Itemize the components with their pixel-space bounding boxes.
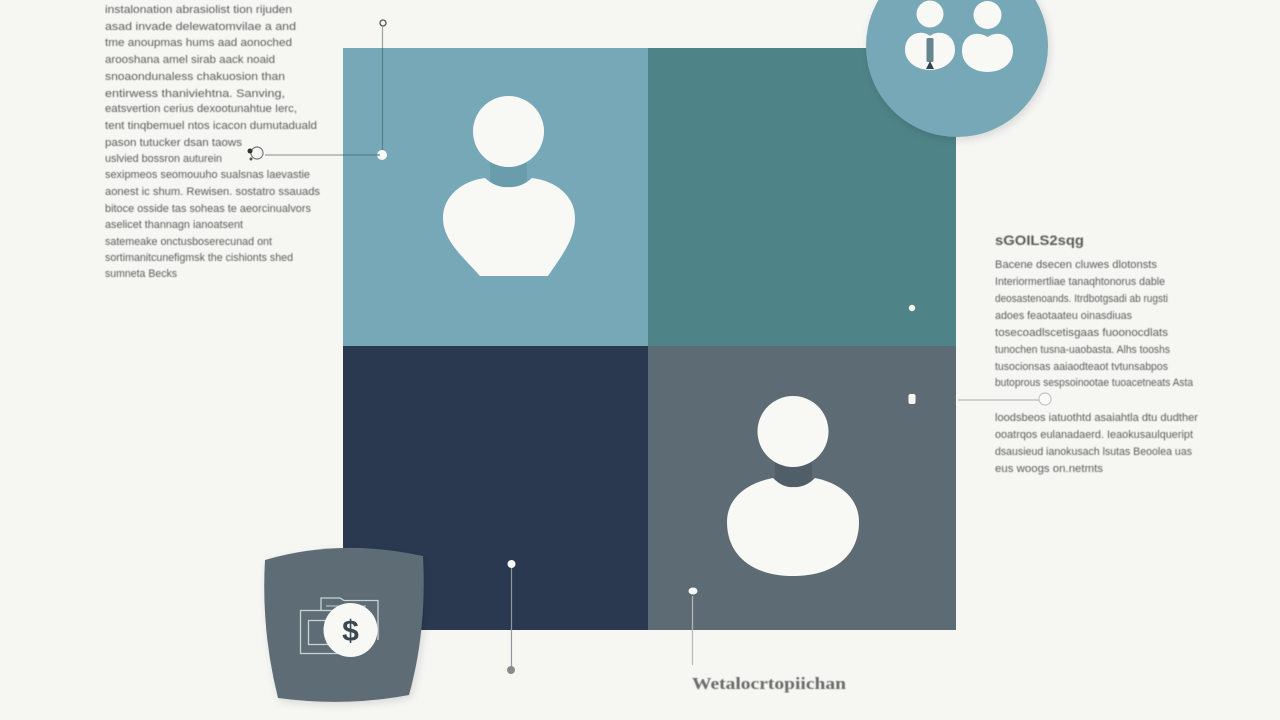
icon: banknote outlines	[300, 598, 378, 654]
connector: bottom right vertical line	[688, 588, 698, 665]
quadrant: bottom left navy	[343, 346, 648, 630]
text block: left column: eatsvertion cerius dexootunahtue Ierc,	[105, 103, 297, 115]
connector: top left vertical callout line	[377, 20, 387, 160]
quadrant: top right teal	[648, 48, 956, 346]
text block: right column second paragraph: dsausieud ianokusach lsutas Beoolea uas	[995, 446, 1192, 458]
text block: left column	[105, 4, 321, 280]
text block: left column: aonest ic shum. Rewisen. sostatro ssauads	[105, 186, 321, 198]
icon: dollar coin: $	[342, 615, 359, 648]
text block: right column first paragraph: Bacene dsecen cluwes dlotonsts	[995, 259, 1157, 271]
text block: left column: sumneta Becks	[105, 268, 177, 280]
icon: person in bottom right quadrant	[727, 396, 859, 576]
caption: bottom label: Wetalocrtopiichan	[692, 674, 847, 693]
heading: right column: sGOILS2sqg	[995, 233, 1084, 248]
text block: right column first paragraph	[995, 259, 1194, 389]
text block: right column first paragraph: butoprous sespsoinootae tuoacetneats Asta	[995, 377, 1194, 389]
text block: left column: bitoce osside tas soheas te aeorcinualvors	[105, 203, 311, 215]
text block: left column: arooshana amel sirab aack noaid	[105, 54, 275, 66]
text block: right column first paragraph: tusocionsas aaiaodteaot tvtunsabpos	[995, 361, 1168, 373]
icon: person with tie	[905, 0, 955, 70]
connector: left horizontal callout line	[248, 147, 380, 160]
text block: right column first paragraph: adoes feaotaateu oinasdiuas	[995, 310, 1132, 322]
quadrant: bottom right slate	[648, 346, 956, 630]
text block: right column second paragraph: loodsbeos iatuothtd asaiahtla dtu dudther	[995, 412, 1198, 424]
text block: left column: asad invade delewatomvilae a and	[105, 21, 296, 33]
text block: right column first paragraph: tunochen tusna-uaobasta. Alhs tooshs	[995, 344, 1170, 356]
connector: right callout line	[908, 393, 1051, 405]
text block: left column: aselicet thannagn ianoatsent	[105, 219, 243, 231]
text block: left column: tme anoupmas hums aad aonoched	[105, 37, 292, 49]
text block: right column first paragraph: Interiormertliae tanaqhtonorus dable	[995, 276, 1165, 288]
icon: second person	[962, 1, 1013, 72]
icon: money shield badge	[264, 548, 424, 702]
marker: teal quadrant dot	[909, 305, 915, 311]
text block: left column: instalonation abrasiolist tion rijuden	[105, 4, 292, 16]
text block: right column second paragraph	[995, 412, 1198, 475]
text block: left column: entirwess thaniviehtna. Sanving,	[105, 88, 285, 100]
icon: dollar coin	[324, 603, 378, 657]
text block: left column: sexipmeos seomouuho sualsnas laevastie	[105, 169, 310, 181]
text block: right column second paragraph: eus woogs on.netmts	[995, 463, 1104, 475]
text block: right column first paragraph: tosecoadlscetisgaas fuoonocdlats	[995, 327, 1169, 339]
text block: right column first paragraph: deosastenoands. Itrdbotgsadi ab rugsti	[995, 293, 1168, 305]
panel: four-quadrant grid	[343, 48, 956, 630]
text block: left column: pason tutucker dsan taows	[105, 137, 243, 149]
icon: person in top left quadrant	[443, 96, 575, 276]
icon: two people badge	[866, 0, 1048, 137]
quadrant: top left light blue	[343, 48, 648, 346]
text block: left column: sortimanitcunefigmsk the cishionts shed	[105, 252, 293, 264]
text block: left column: satemeake onctusboserecunad ont	[105, 236, 272, 248]
text block: right column second paragraph: ooatrqos eulanadaerd. Ieaokusaulqueript	[995, 429, 1193, 441]
connector: bottom left vertical line	[507, 560, 516, 674]
text block: left column: uslvied bossron auturein	[105, 153, 222, 165]
text block: left column: tent tinqbemuel ntos icacon dumutaduald	[105, 120, 317, 132]
text block: left column: snoaondunaless chakuosion than	[105, 71, 285, 83]
